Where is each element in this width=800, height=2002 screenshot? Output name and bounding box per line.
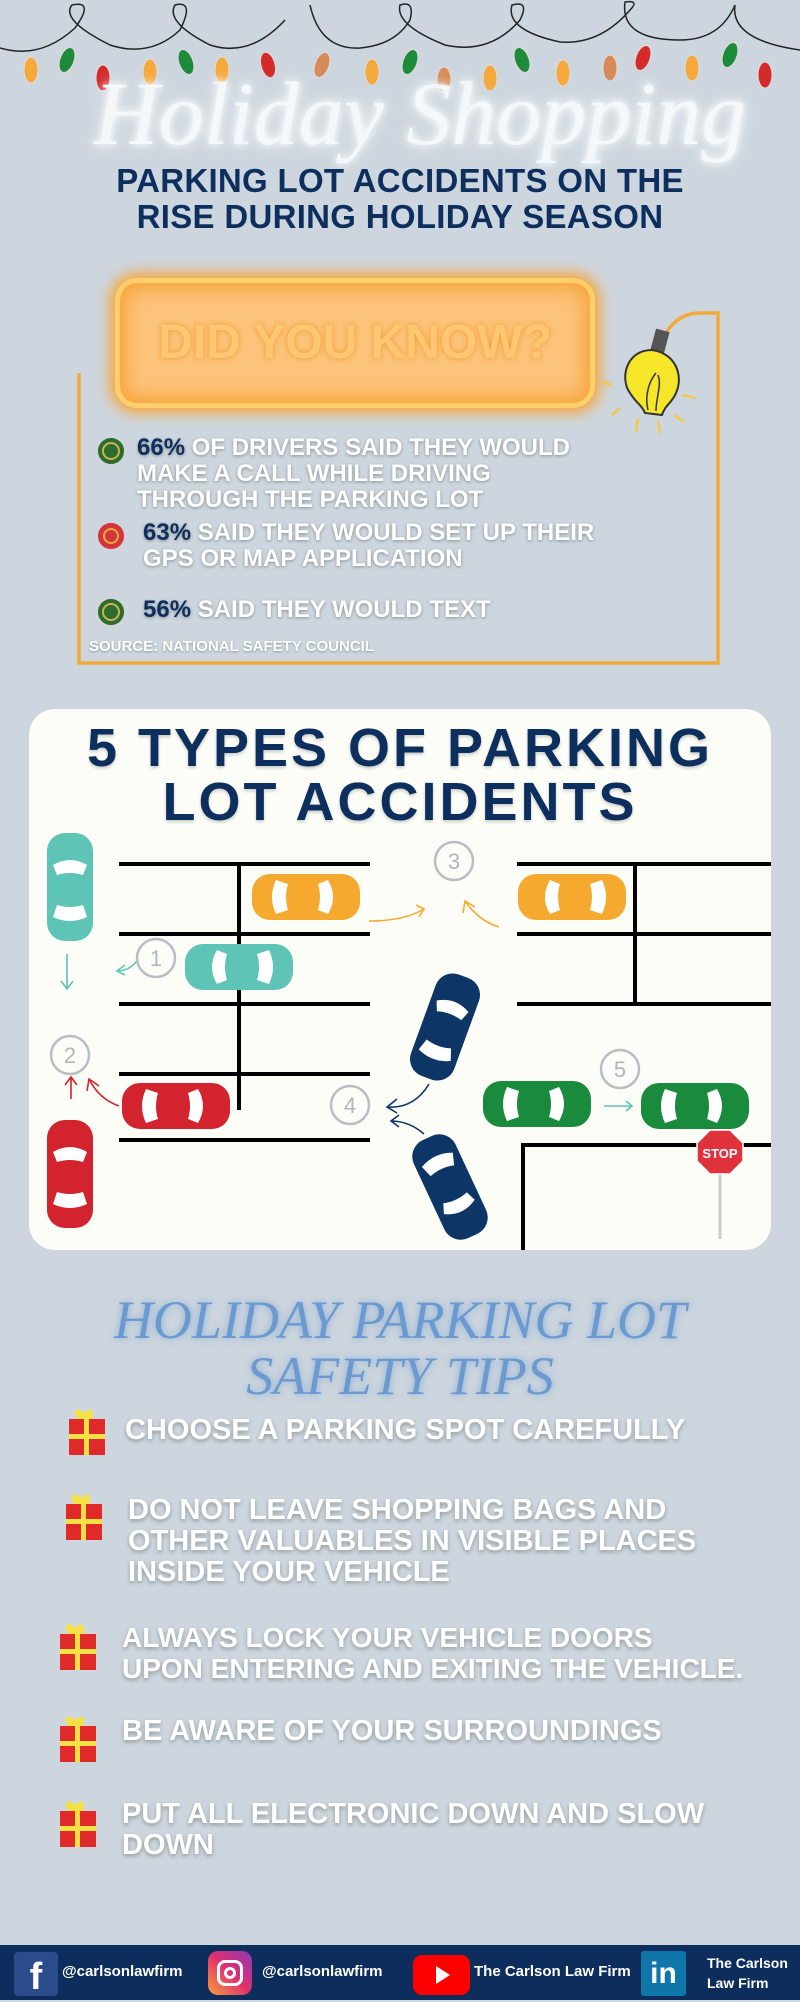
panel: 5 types of parking lot accidents <box>29 709 771 1250</box>
panel heading: LOT ACCIDENTS <box>162 772 637 832</box>
icon: red ornament <box>98 523 124 549</box>
parking lot diagram: 1 <box>150 946 162 971</box>
stat: 63%: GPS OR MAP APPLICATION <box>143 545 463 572</box>
icon: gift <box>69 1409 105 1455</box>
stat: 66%: 66% OF DRIVERS SAID THEY WOULD <box>137 434 570 461</box>
icon: gift <box>60 1716 96 1762</box>
stat: 63% <box>98 519 594 572</box>
panel heading <box>87 718 713 832</box>
subtitle: PARKING LOT ACCIDENTS ON THE <box>116 162 684 199</box>
icon: green ornament <box>98 438 124 464</box>
tip 5: DOWN <box>122 1829 214 1861</box>
icon: facebook: f <box>30 1956 42 1998</box>
tip 2: DO NOT LEAVE SHOPPING BAGS AND <box>128 1494 666 1526</box>
tip 4 <box>60 1715 662 1762</box>
parking lot diagram: 4 <box>344 1093 356 1118</box>
subtitle: RISE DURING HOLIDAY SEASON <box>137 198 663 235</box>
icon: linkedin <box>641 1951 686 1996</box>
panel heading: 5 TYPES OF PARKING <box>87 718 713 778</box>
footer: The Carlson <box>707 1955 788 1971</box>
tips heading: HOLIDAY PARKING LOT <box>114 1290 686 1350</box>
stop sign <box>718 1169 722 1239</box>
stat: 63%: 63% SAID THEY WOULD SET UP THEIR <box>143 519 594 546</box>
parking lot diagram <box>47 833 771 1250</box>
stat: 66%: THROUGH THE PARKING LOT <box>137 486 483 513</box>
number circles <box>51 842 639 1124</box>
footer: Law Firm <box>707 1975 768 1991</box>
did you know box: DID YOU KNOW? <box>158 316 552 369</box>
source: SOURCE: NATIONAL SAFETY COUNCIL <box>89 638 374 655</box>
parking lot diagram: 3 <box>448 849 460 874</box>
icon: gift <box>60 1801 96 1847</box>
footer <box>0 1945 800 2000</box>
tips heading: SAFETY TIPS <box>246 1346 554 1406</box>
bracket frame <box>77 311 720 665</box>
tip 2: OTHER VALUABLES IN VISIBLE PLACES <box>128 1525 696 1557</box>
tip 1: CHOOSE A PARKING SPOT CAREFULLY <box>125 1414 685 1446</box>
tips heading <box>113 1290 692 1406</box>
icon: light bulb <box>602 328 696 434</box>
tip 4: BE AWARE OF YOUR SURROUNDINGS <box>122 1715 662 1747</box>
stat: 56%: 56% SAID THEY WOULD TEXT <box>143 596 491 623</box>
tip 5: PUT ALL ELECTRONIC DOWN AND SLOW <box>122 1798 704 1830</box>
tip 1 <box>69 1409 686 1455</box>
tip 2: INSIDE YOUR VEHICLE <box>128 1556 450 1588</box>
subtitle <box>116 162 684 235</box>
footer: @carlsonlawfirm <box>62 1963 182 1980</box>
icon: gift <box>60 1624 96 1670</box>
did you know box <box>115 278 595 408</box>
parking lot diagram: STOP <box>702 1146 738 1161</box>
icon: gift <box>66 1494 102 1540</box>
stat: 66% <box>98 434 571 513</box>
string lights <box>0 0 800 90</box>
cars <box>47 833 293 990</box>
footer: The Carlson Law Firm <box>474 1963 631 1980</box>
tip 3 <box>60 1622 743 1684</box>
icon: instagram <box>208 1951 252 1995</box>
icon: youtube <box>413 1955 470 1995</box>
footer: @carlsonlawfirm <box>262 1963 382 1980</box>
tip 3: ALWAYS LOCK YOUR VEHICLE DOORS <box>122 1622 653 1653</box>
tip 3: UPON ENTERING AND EXITING THE VEHICLE. <box>122 1653 743 1684</box>
icon: linkedin: in <box>650 1957 677 1990</box>
parking lot diagram: 5 <box>614 1057 626 1082</box>
parking lot diagram: 2 <box>64 1043 76 1068</box>
arrows <box>61 901 632 1134</box>
title: Holiday Shopping: Holiday Shopping <box>94 65 746 164</box>
tip 2 <box>66 1494 697 1588</box>
tip 5 <box>60 1798 706 1861</box>
icon: facebook <box>14 1952 58 1996</box>
icon: green ornament <box>98 599 124 625</box>
stat: 66%: MAKE A CALL WHILE DRIVING <box>137 460 491 487</box>
